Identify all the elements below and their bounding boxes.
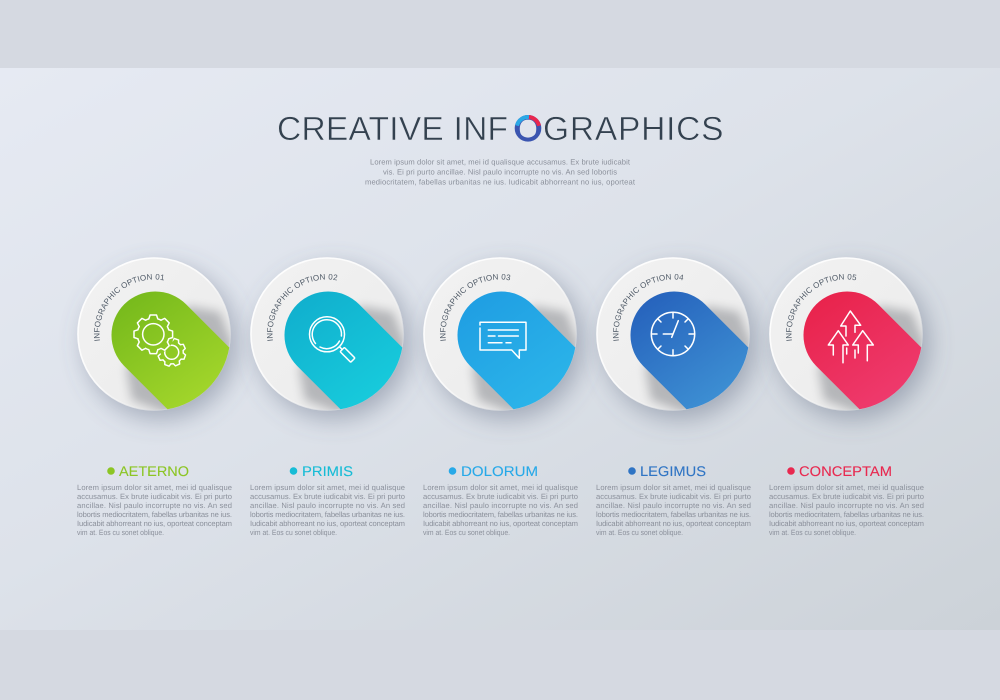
dark blue shape — [630, 291, 748, 409]
text: Aeterno body — [77, 483, 232, 537]
text: Aeterno body: Lorem ipsum dolor sit amet, mei id qualisque — [77, 483, 232, 492]
text: Dolorum body: ancillae. Nisl paulo incorrupte no vis. An sed — [423, 501, 578, 510]
text: Aeterno body: vim at. Eos cu sonet oblique. — [77, 528, 164, 537]
column: Conceptam — [769, 463, 924, 537]
text: Aeterno body: lobortis mediocritatem, fabellas urbanitas ne ius. — [77, 510, 232, 519]
green shape — [111, 291, 229, 409]
column: Primis — [250, 463, 405, 537]
red shape — [803, 291, 921, 409]
text: Conceptam body: lobortis mediocritatem, fabellas urbanitas ne ius. — [769, 510, 924, 519]
panel: option 02 disc — [246, 254, 422, 431]
panel: option 03 disc — [418, 254, 595, 431]
icon: magnifier — [310, 317, 355, 362]
text: Aeterno body: Iudicabit abhorreant no ius, oporteat conceptam — [77, 519, 232, 528]
text: Aeterno body: accusamus. Ex brute iudicabit vis. Ei pri purto — [77, 492, 232, 501]
title — [277, 111, 724, 148]
curved label 01: INFOGRAPHIC OPTION 01 — [94, 274, 164, 341]
curved label 03: INFOGRAPHIC OPTION 03 — [440, 274, 510, 341]
text: Primis body: Lorem ipsum dolor sit amet, mei id qualisque — [250, 483, 405, 492]
curved label 02: INFOGRAPHIC OPTION 02 — [266, 274, 338, 341]
intro text: mediocritatem, fabellas urbanitas ne ius. Iudicabit abhorreant no ius, oporteat — [365, 178, 636, 186]
heading: Legimus: LEGIMUS — [640, 463, 706, 479]
heading: Aeterno: AETERNO — [119, 463, 189, 479]
text: Dolorum body: Lorem ipsum dolor sit amet, mei id qualisque — [423, 483, 578, 492]
title: CREATIVE INF — [277, 111, 508, 148]
text: Legimus body: ancillae. Nisl paulo incorrupte no vis. An sed — [596, 501, 751, 510]
curved label 05: INFOGRAPHIC OPTION 05 — [786, 274, 856, 341]
text: Conceptam body: accusamus. Ex brute iudicabit vis. Ei pri purto — [769, 492, 924, 501]
text: Legimus body: Lorem ipsum dolor sit amet, mei id qualisque — [596, 483, 751, 492]
text: Primis body — [250, 483, 405, 537]
panel: option 04 disc — [592, 254, 767, 431]
text: Legimus body: Iudicabit abhorreant no ius, oporteat conceptam — [596, 519, 751, 528]
intro text — [365, 158, 636, 186]
text: Primis body: vim at. Eos cu sonet oblique. — [250, 528, 337, 537]
text: Dolorum body: accusamus. Ex brute iudicabit vis. Ei pri purto — [423, 492, 578, 501]
text: Legimus body: accusamus. Ex brute iudicabit vis. Ei pri purto — [596, 492, 751, 501]
intro text: vis. Ei pri purto ancillae. Nisl paulo incorrupte no vis. An sed lobortis — [383, 168, 617, 176]
heading: Primis: PRIMIS — [302, 463, 353, 479]
text: Conceptam body: vim at. Eos cu sonet oblique. — [769, 528, 856, 537]
text: Conceptam body: ancillae. Nisl paulo incorrupte no vis. An sed — [769, 501, 924, 510]
title: GRAPHICS — [543, 111, 724, 148]
heading: Dolorum: DOLORUM — [461, 463, 538, 479]
heading: Conceptam: CONCEPTAM — [799, 463, 892, 479]
text: Conceptam body: Iudicabit abhorreant no ius, oporteat conceptam — [769, 519, 924, 528]
text: Dolorum body: Iudicabit abhorreant no ius, oporteat conceptam — [423, 519, 578, 528]
intro text: Lorem ipsum dolor sit amet, mei id qualisque accusamus. Ex brute iudicabit — [370, 158, 631, 166]
cyan shape — [284, 291, 402, 409]
column: Dolorum — [423, 463, 578, 537]
text: Dolorum body: vim at. Eos cu sonet oblique. — [423, 528, 510, 537]
text: Primis body: ancillae. Nisl paulo incorrupte no vis. An sed — [250, 501, 405, 510]
curved label 04: INFOGRAPHIC OPTION 04 — [612, 274, 684, 341]
blue shape — [457, 291, 575, 409]
panel: option 05 disc — [766, 254, 941, 431]
text: Dolorum body — [423, 483, 578, 537]
title: O — [515, 111, 541, 148]
text: Legimus body: vim at. Eos cu sonet oblique. — [596, 528, 683, 537]
text: Conceptam body: Lorem ipsum dolor sit amet, mei id qualisque — [769, 483, 924, 492]
text: Legimus body: lobortis mediocritatem, fabellas urbanitas ne ius. — [596, 510, 751, 519]
column: Aeterno — [77, 463, 232, 537]
column: Legimus — [596, 463, 751, 537]
text: Conceptam body — [769, 483, 924, 537]
text: Primis body: Iudicabit abhorreant no ius, oporteat conceptam — [250, 519, 405, 528]
icon: clock — [651, 312, 695, 356]
text: Aeterno body: ancillae. Nisl paulo incorrupte no vis. An sed — [77, 501, 232, 510]
text: Dolorum body: lobortis mediocritatem, fabellas urbanitas ne ius. — [423, 510, 578, 519]
text: Primis body: accusamus. Ex brute iudicabit vis. Ei pri purto — [250, 492, 405, 501]
text: Legimus body — [596, 483, 751, 537]
panel: option 01 disc — [72, 254, 249, 431]
icon: ring letter O — [517, 117, 539, 140]
icon: three arrows — [828, 311, 873, 363]
text: Primis body: lobortis mediocritatem, fabellas urbanitas ne ius. — [250, 510, 405, 519]
icon: gears — [134, 315, 190, 370]
icon: chat bubble — [480, 322, 526, 358]
